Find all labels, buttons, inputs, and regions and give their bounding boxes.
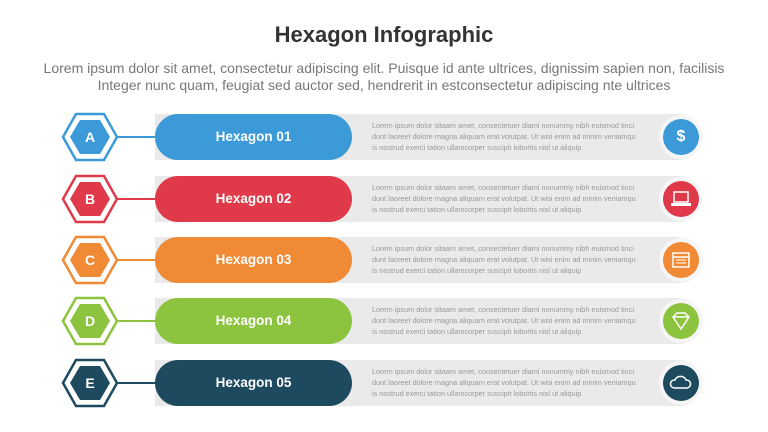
pill 04 [155,298,352,344]
hexagon C: C [85,252,95,268]
hexagon A: A [85,129,95,145]
subtitle: Integer nunc quam, feugiat sed auctor sed, hendrerit in estconsectetur adipiscing nte ultrices [98,77,670,93]
pill 05 [155,360,352,406]
icon: dollar [659,115,703,159]
text 03 [372,244,636,275]
pill 01 [155,114,352,160]
row E [62,358,703,408]
icon: dollar: $ [677,128,685,145]
text 01: dunt laoreet dolore magna aliquam erat volutpat. Ut wisi enim ad minim veniamqu [372,132,636,141]
text 05: dunt laoreet dolore magna aliquam erat volutpat. Ut wisi enim ad minim veniamqu [372,378,636,387]
row C [62,236,703,284]
hexagon C [62,236,156,284]
pill 05: Hexagon 05 [216,375,291,390]
text 01: Lorem ipsum dolor sitaam amet, consectetuer diami nonummy nibh euismod tinci [372,121,634,130]
subtitle: Lorem ipsum dolor sit amet, consectetur adipiscing elit. Puisque id ante ultrices, dignissim sapien non, facilisis [44,60,724,76]
row D [62,296,703,346]
subtitle [44,60,724,93]
icon: laptop [659,177,703,221]
text 05 [372,367,636,398]
text 02: dunt laoreet dolore magna aliquam erat volutpat. Ut wisi enim ad minim veniamqu [372,194,636,203]
hexagon B: B [85,191,95,207]
icon: diamond [659,299,703,343]
text 04: dunt laoreet dolore magna aliquam erat volutpat. Ut wisi enim ad minim veniamqu [372,316,636,325]
row A [62,112,703,162]
pill 01: Hexagon 01 [216,129,291,144]
text 02: Lorem ipsum dolor sitaam amet, consectetuer diami nonummy nibh euismod tinci [372,183,634,192]
hexagon D: D [85,313,95,329]
text 03: Lorem ipsum dolor sitaam amet, consectetuer diami nonummy nibh euismod tinci [372,244,634,253]
text 04 [372,305,636,336]
text 01 [372,121,636,152]
text 05: is nostrud exerci tation ullamcorper suscipit lobortis nisl ut aliquip [372,389,581,398]
icon: cloud [659,361,703,405]
title: Hexagon Infographic [275,22,493,47]
hexagon E: E [85,375,95,391]
pill 04: Hexagon 04 [216,313,291,328]
row B [62,174,703,224]
icon: calendar [659,238,703,282]
text 01: is nostrud exerci tation ullamcorper suscipit lobortis nisl ut aliquip [372,143,581,152]
hexagon E [62,358,156,408]
text 04: Lorem ipsum dolor sitaam amet, consectetuer diami nonummy nibh euismod tinci [372,305,634,314]
pill 03: Hexagon 03 [216,252,291,267]
text 04: is nostrud exerci tation ullamcorper suscipit lobortis nisl ut aliquip [372,327,581,336]
hexagon B [62,174,156,224]
text 02 [372,183,636,214]
pill 02 [155,176,352,222]
text 02: is nostrud exerci tation ullamcorper suscipit lobortis nisl ut aliquip [372,205,581,214]
hexagon A [62,112,156,162]
pill 03 [155,237,352,283]
text 05: Lorem ipsum dolor sitaam amet, consectetuer diami nonummy nibh euismod tinci [372,367,634,376]
text 03: dunt laoreet dolore magna aliquam erat volutpat. Ut wisi enim ad minim veniamqu [372,255,636,264]
text 03: is nostrud exerci tation ullamcorper suscipit lobortis nisl ut aliquip [372,266,581,275]
pill 02: Hexagon 02 [216,191,291,206]
hexagon D [62,296,156,346]
